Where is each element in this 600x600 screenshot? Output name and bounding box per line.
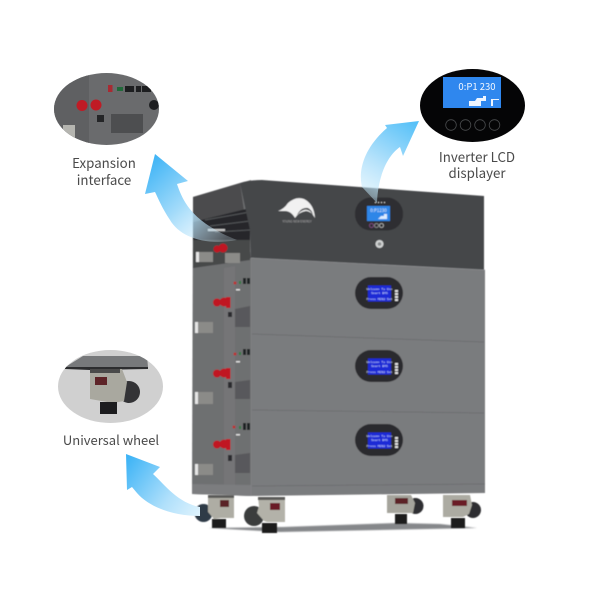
port recess row 2	[235, 306, 250, 327]
lcd screen	[443, 77, 501, 108]
inverter panel	[355, 198, 403, 230]
label: inverter LCD displayer: Inverter LCD	[439, 147, 515, 166]
bms panel 3	[355, 424, 403, 456]
lcd readout: 0:P1230	[370, 208, 387, 214]
side wall vent lines	[205, 212, 250, 232]
bracket ends	[196, 252, 199, 262]
callout: universal wheel photo	[58, 350, 164, 424]
logo caption: YOUNG NEW ENERGY	[281, 220, 312, 224]
bms panel 1: Press MENU Set	[366, 297, 393, 301]
port row 2	[228, 312, 232, 317]
switches row 4	[232, 426, 236, 428]
side lighter column	[224, 266, 235, 486]
red terminals row 2	[213, 297, 230, 308]
label: inverter LCD displayer	[439, 147, 515, 182]
wheel front middle	[244, 497, 285, 533]
bms panel 3: Welcome To Use	[366, 434, 393, 438]
logo mark	[278, 198, 315, 218]
logo	[278, 198, 315, 224]
wheel tyre	[123, 381, 140, 403]
callout: inverter LCD photo	[420, 69, 525, 142]
callout: expansion interface photo	[54, 73, 160, 146]
label: expansion interface	[72, 153, 136, 189]
power button	[376, 240, 384, 248]
cabinet corner	[65, 356, 148, 367]
bms lcd	[368, 432, 391, 448]
module seams	[252, 334, 485, 486]
bms keys	[395, 290, 398, 301]
castor top shade	[90, 369, 120, 373]
bms lcd	[368, 286, 391, 302]
bms panel 1: Smart BMS	[371, 291, 388, 295]
bracket row 3	[195, 392, 213, 404]
lcd graphic	[378, 214, 387, 219]
arrow to universal wheel	[126, 454, 200, 516]
square recess	[111, 114, 143, 133]
port row	[125, 86, 151, 92]
metal bracket	[63, 125, 75, 138]
battery cabinet	[192, 180, 485, 496]
bms panel 1: Welcome To Use	[366, 287, 393, 291]
arrow to expansion interface	[145, 154, 237, 242]
interface switches	[208, 229, 225, 231]
label: expansion interface: interface	[77, 170, 131, 189]
photo background	[54, 73, 160, 146]
red terminals	[76, 100, 102, 111]
metal brackets row 1	[196, 252, 240, 263]
wheels	[194, 495, 481, 533]
cabinet front dark lid	[240, 180, 484, 270]
lcd readout: 0:P1 230	[458, 79, 496, 93]
panel oval	[355, 198, 403, 230]
photo background	[58, 350, 164, 424]
foot	[100, 402, 117, 414]
bms panel 2: Press MENU Set	[366, 370, 393, 374]
cabinet side wall	[192, 180, 251, 496]
bms panel 3: Smart BMS	[371, 438, 388, 442]
wheel back right	[443, 495, 481, 528]
bms keys	[395, 363, 398, 374]
label: universal wheel: Universal wheel	[63, 430, 159, 449]
bms panel 2: Welcome To Use	[366, 360, 393, 364]
panel buttons	[370, 224, 384, 228]
bms panel 3: Press MENU Set	[366, 444, 393, 448]
red switch	[108, 85, 112, 92]
round connector	[149, 100, 159, 110]
expansion interface opening	[193, 208, 250, 240]
bms panel 2	[355, 350, 403, 382]
switches row 3	[234, 352, 236, 356]
red terminals row 3	[213, 368, 230, 379]
cabinet front mid section	[251, 258, 485, 496]
port block	[97, 115, 104, 122]
red terminals row 1	[214, 244, 228, 252]
side connectors	[195, 244, 250, 475]
wheel back middle	[387, 495, 424, 524]
castor body	[90, 369, 127, 403]
panel lcd	[367, 206, 390, 221]
control buttons	[446, 120, 500, 130]
lcd graphic	[469, 96, 499, 106]
bms panel 2: Smart BMS	[371, 364, 388, 368]
label: expansion interface: Expansion	[72, 153, 136, 172]
red terminals row 4	[213, 439, 230, 450]
arrow to inverter display	[361, 121, 419, 203]
port recess row 4	[235, 453, 250, 473]
bms panel 1	[355, 277, 403, 309]
bms keys	[395, 437, 398, 448]
side lower base strip	[192, 484, 251, 496]
green indicator	[117, 87, 123, 91]
port recess row 3	[235, 380, 250, 399]
panel indicator dots	[375, 202, 385, 203]
switches row 2	[234, 282, 236, 284]
side wall dark top	[193, 183, 251, 268]
bms lcd	[368, 358, 391, 374]
ground shadow	[208, 523, 477, 532]
black oval	[420, 69, 525, 142]
red label	[95, 377, 107, 385]
bracket row 2	[195, 322, 213, 333]
wheel front left	[194, 495, 234, 528]
bracket row 4	[195, 464, 213, 475]
logo inner curve	[297, 208, 313, 215]
label: inverter LCD displayer: displayer	[448, 163, 506, 182]
